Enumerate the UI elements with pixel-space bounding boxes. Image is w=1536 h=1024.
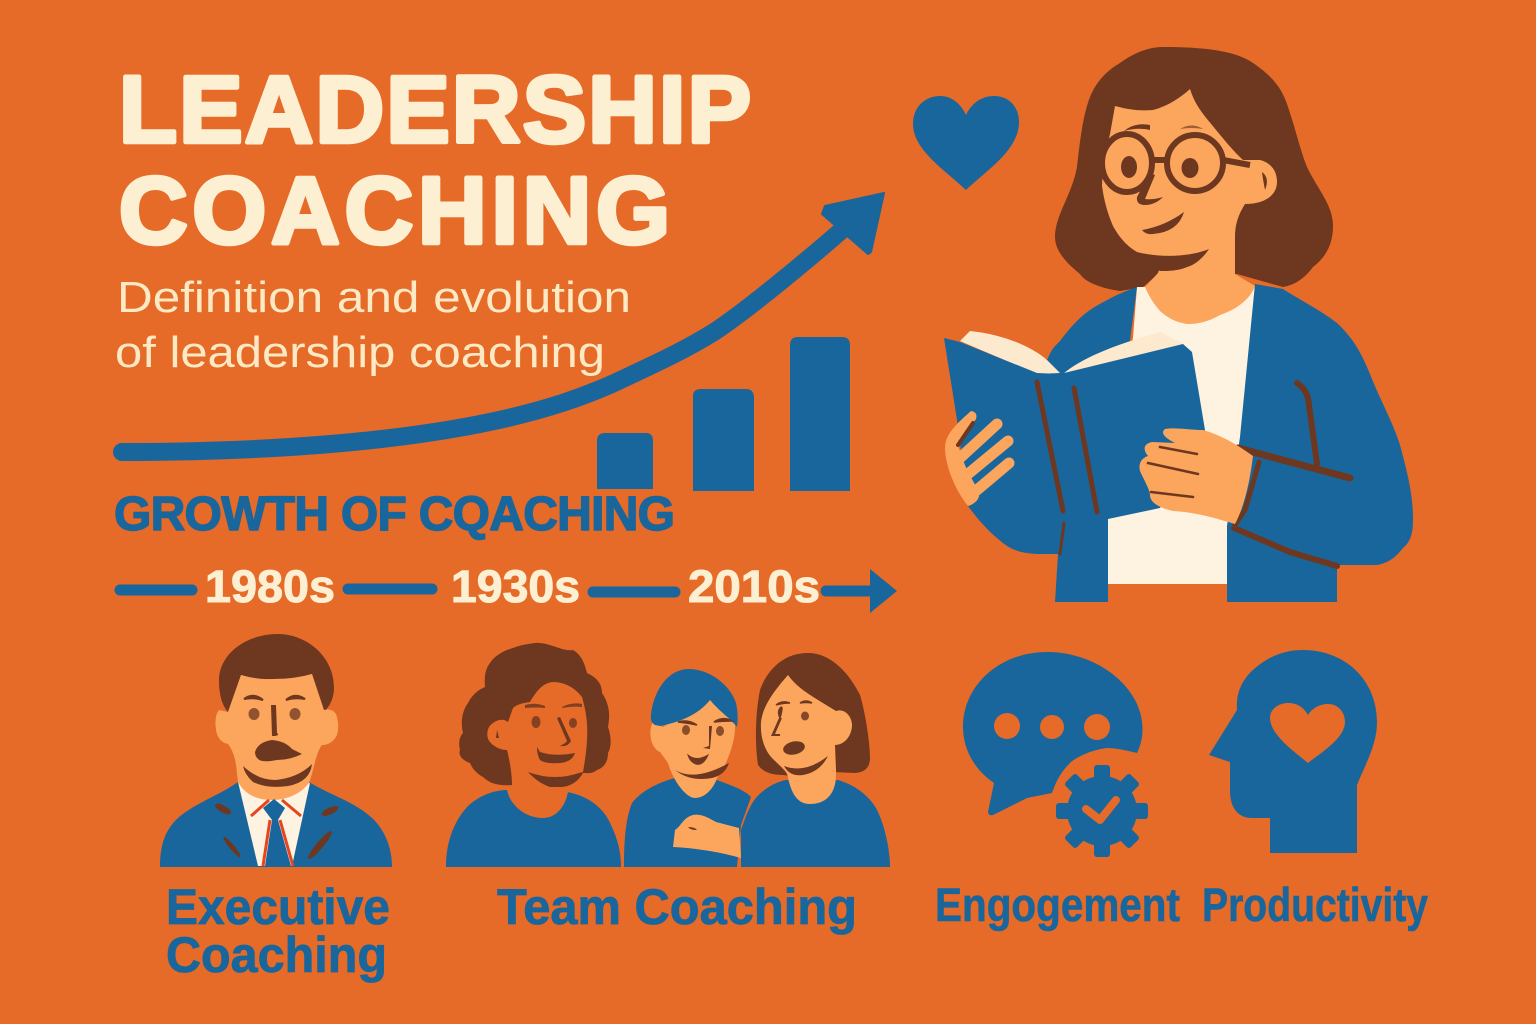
right hand	[1139, 428, 1253, 524]
label: executive coaching	[166, 879, 390, 983]
title: LEADERSHIP	[119, 57, 751, 163]
icon: head with heart	[1209, 650, 1377, 853]
shirt	[238, 782, 310, 866]
heading: growth of coaching: GROWTH OF CQACHING	[114, 488, 675, 541]
facial features	[213, 696, 340, 861]
icon: speech bubble with gear	[963, 652, 1148, 857]
subtitle: Definition and evolution	[117, 273, 631, 322]
timeline: 2010s	[688, 561, 820, 612]
book and sleeve lines	[1037, 382, 1350, 566]
label: engagement: Engogement	[935, 878, 1180, 931]
label: executive coaching: Coaching	[166, 927, 387, 983]
hair	[219, 634, 334, 712]
face and neck	[1102, 89, 1277, 324]
timeline: 1980s	[205, 561, 335, 612]
subtitle: of leadership coaching	[115, 328, 605, 377]
book	[944, 338, 1205, 525]
subtitle	[115, 273, 631, 377]
woman with bob hair	[741, 653, 890, 867]
illustration: coach reading a book	[944, 47, 1413, 602]
eyes, nose, brows and mouth	[1121, 124, 1267, 234]
glasses	[1102, 134, 1250, 192]
jacket	[968, 284, 1413, 602]
jaw shadow	[1137, 249, 1209, 271]
hair	[1055, 47, 1333, 291]
illustration: team	[446, 643, 890, 867]
jacket	[160, 782, 392, 867]
shirt	[1108, 287, 1255, 584]
bar chart	[597, 337, 850, 491]
curly-haired person	[446, 643, 621, 867]
label: productivity: Productivity	[1202, 878, 1428, 931]
icon: heart	[913, 96, 1019, 190]
boy with blue hair	[624, 669, 751, 867]
growth arrow	[122, 193, 884, 452]
timeline	[120, 561, 897, 613]
illustration: executive	[160, 634, 392, 867]
timeline: 1930s	[451, 561, 580, 612]
label: team coaching: Team Coaching	[497, 879, 857, 935]
crossed arm	[673, 815, 741, 858]
book pages	[960, 331, 1184, 374]
tie and collar	[251, 799, 301, 866]
title	[119, 57, 751, 264]
label: executive coaching: Executive	[166, 879, 390, 935]
gear	[1056, 765, 1148, 857]
left hand	[945, 411, 1009, 506]
face and neck	[215, 674, 338, 800]
title: COACHING	[119, 158, 670, 264]
